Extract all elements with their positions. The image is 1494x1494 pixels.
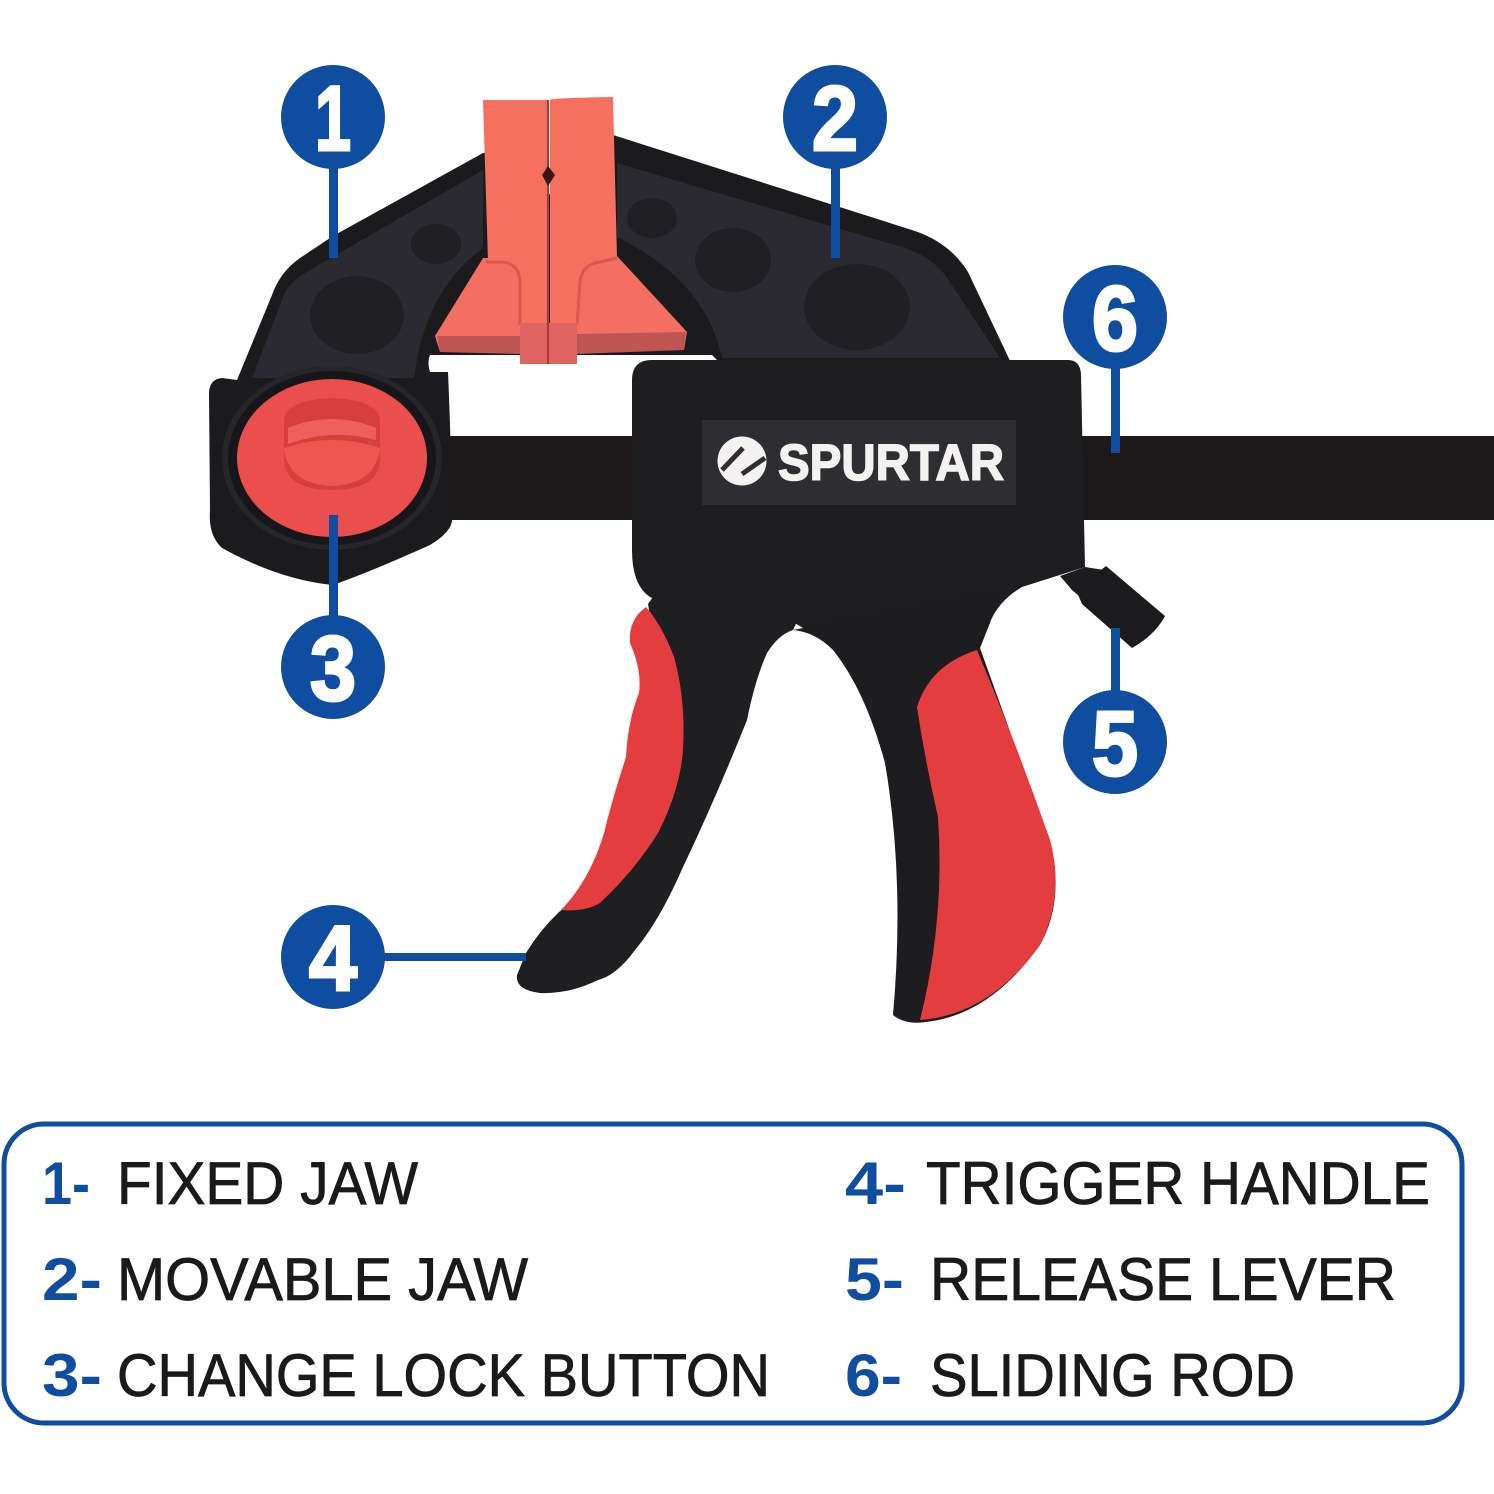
callout 4: 4 [309, 908, 357, 1010]
callout 6: 6 [1092, 268, 1138, 370]
logo icon [718, 436, 766, 486]
callout 3 [281, 515, 385, 720]
brand name: SPURTAR [778, 434, 1004, 491]
callout 1: 1 [315, 68, 351, 170]
legend item 6: 6- [845, 1342, 902, 1409]
callout 6 [1063, 265, 1167, 453]
brand label [702, 420, 1016, 505]
legend item 1: FIXED JAW [117, 1150, 418, 1217]
main slider block [632, 360, 1085, 700]
lock knob [284, 398, 380, 490]
callout 2: 2 [812, 68, 858, 170]
change lock button [222, 366, 442, 550]
callout 4 [281, 905, 526, 1010]
legend item 1: 1- [42, 1150, 90, 1217]
legend item 4: 4- [845, 1150, 906, 1217]
sliding rod bar [440, 436, 1494, 520]
legend item 2: 2- [42, 1246, 102, 1313]
callout 1 [281, 65, 385, 258]
trigger grip [561, 607, 684, 910]
trigger [517, 570, 800, 993]
jaw recess circles [310, 224, 461, 354]
callout 2 [783, 65, 887, 258]
fixed jaw body [209, 153, 500, 585]
movable jaw body [500, 135, 1012, 365]
panel: movable jaw recess [617, 163, 1000, 358]
legend item 5: RELEASE LEVER [930, 1246, 1396, 1313]
release lever [1060, 566, 1165, 648]
callout 5 [1063, 628, 1167, 795]
legend item 6: SLIDING ROD [930, 1342, 1295, 1409]
callout 3: 3 [310, 618, 356, 720]
legend item 3: CHANGE LOCK BUTTON [117, 1342, 770, 1409]
rear grip [917, 650, 1056, 1020]
legend item 4: TRIGGER HANDLE [926, 1150, 1430, 1217]
legend item 3: 3- [42, 1342, 102, 1409]
red jaw pads [435, 97, 687, 364]
rear handle [793, 590, 1056, 1023]
legend item 5: 5- [845, 1246, 904, 1313]
panel: legend [4, 1124, 1462, 1423]
panel: fixed jaw recess [252, 170, 483, 378]
movable recess circles [627, 198, 910, 350]
callout 5: 5 [1092, 693, 1138, 795]
legend item 2: MOVABLE JAW [117, 1246, 528, 1313]
